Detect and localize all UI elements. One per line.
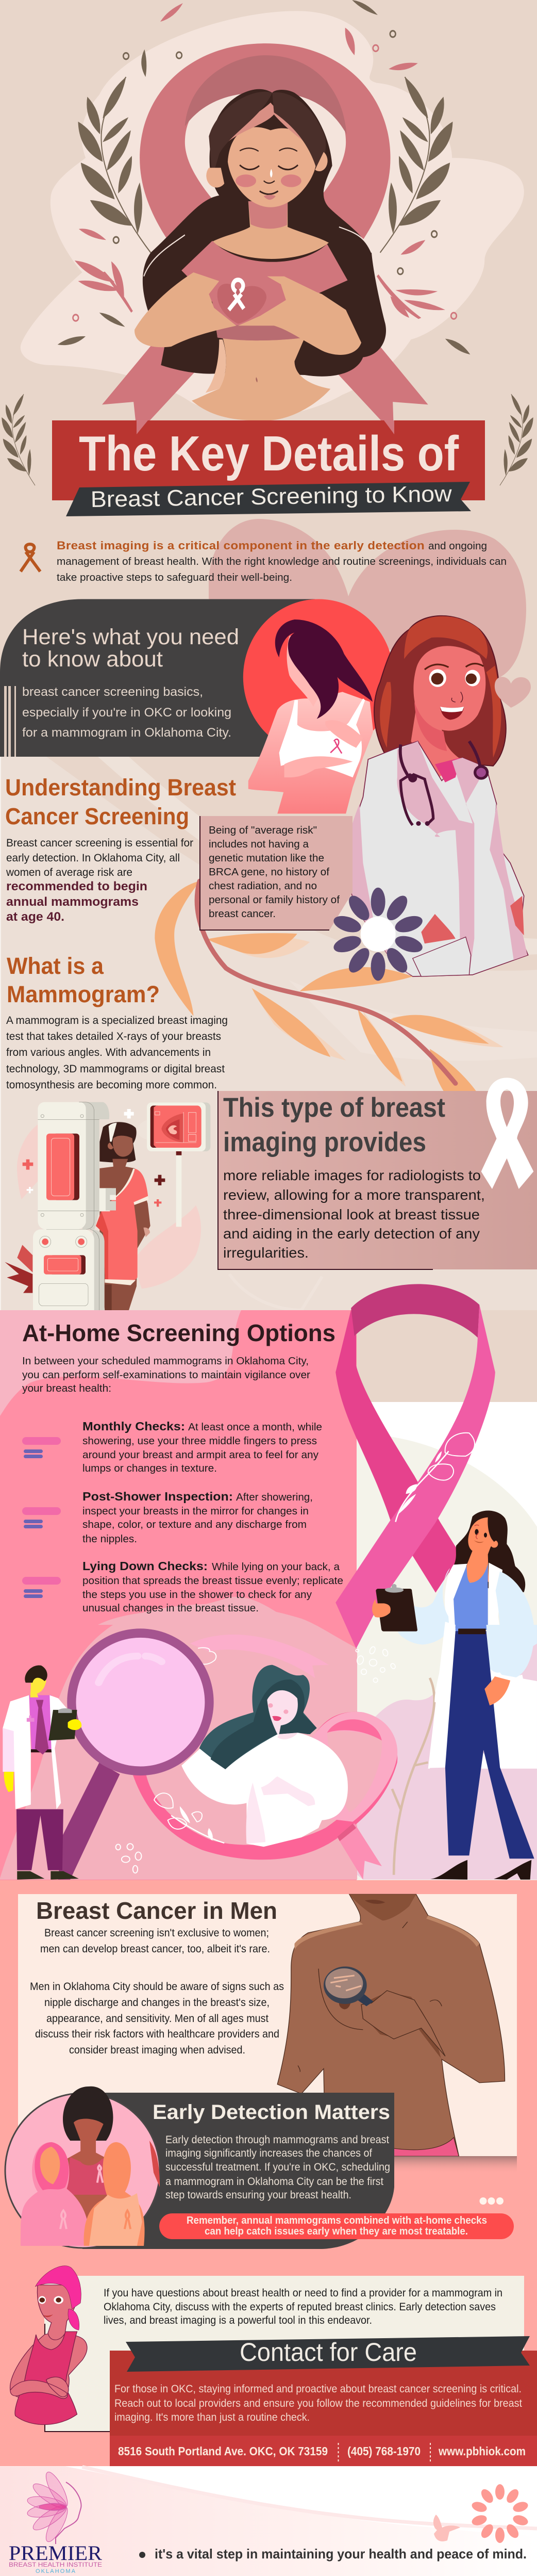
laurel bottom left (2, 394, 35, 485)
text: Early detection through mammograms and breast (165, 2134, 389, 2146)
section: understanding breast cancer screening (5, 774, 236, 924)
illustration: magnifier, woman and ribbon (3, 1628, 397, 1880)
pale pink shapes (357, 1625, 537, 1880)
footer (0, 2466, 537, 2576)
logo wordmark: PREMIER (9, 2541, 102, 2565)
illustration: circle of three women (5, 2086, 160, 2248)
light pink area (0, 1604, 357, 1880)
body text: early detection. In Oklahoma City, all (6, 852, 180, 864)
item: monthly checks: lumps or changes in texture. (82, 1463, 217, 1474)
body text: review, allowing for a more transparent, (223, 1187, 485, 1203)
text: appearance, and sensitivity. Men of all ages must (46, 2012, 268, 2025)
item: monthly checks: At least once a month, while (188, 1422, 322, 1433)
body text: technology, 3D mammograms or digital breast (6, 1063, 225, 1075)
three dots (479, 2197, 504, 2205)
panel: this type of breast imaging (218, 1078, 537, 1269)
panel: breast cancer in men (18, 1894, 517, 2156)
intro text lines (57, 541, 507, 583)
ribbon swoosh (190, 1635, 329, 1678)
ribbon behind the woman (102, 43, 428, 434)
callout: average risk: personal or family history of (209, 894, 340, 906)
callout: average risk: breast cancer. (209, 908, 276, 920)
highlighted text: recommended to begin (6, 879, 147, 893)
panel text: breast cancer screening basics, (22, 685, 203, 699)
large background heart (209, 519, 526, 680)
laurel top left (78, 77, 150, 253)
body text: women of average risk are (6, 867, 132, 878)
body text: Breast cancer screening is essential for (6, 837, 193, 849)
machine column (79, 1102, 109, 1229)
text: successful treatment. If you're in OKC, scheduling (165, 2161, 390, 2173)
item: monthly checks: around your breast and armpit area to feel for any (82, 1449, 318, 1461)
item: post-shower inspection: shape, color, or texture and any discharge from (82, 1519, 307, 1530)
body text: irregularities. (223, 1245, 309, 1261)
item: monthly checks: showering, use your three middle fingers to press (82, 1436, 317, 1447)
red reminder pill: Remember, annual mammograms combined with at-home checks (187, 2215, 487, 2226)
item: lying down checks (22, 1559, 343, 1614)
callout: average risk (199, 816, 353, 930)
faint heart outline (229, 1274, 322, 1310)
icon: white ribbon (481, 1078, 533, 1189)
icon: purple flower (331, 888, 425, 981)
panel: early detection matters (5, 2086, 514, 2249)
item: post-shower inspection (22, 1490, 313, 1545)
laurel bottom right (500, 394, 533, 485)
big pink ribbon (335, 1284, 495, 1649)
intro text lines: management of breast health. With the right knowledge and routine screenings, individuals can (57, 556, 507, 567)
intro text lines: and ongoing (428, 541, 487, 552)
callout: average risk: chest radiation, and no (209, 881, 317, 892)
text: consider breast imaging when advised. (69, 2044, 245, 2056)
hero illustration: woman with pink ribbon (2, 0, 533, 485)
intro block (21, 539, 425, 572)
item: lying down checks: position that spreads the breast tissue evenly; replicate (82, 1575, 343, 1587)
panel heading: Here's what you need (22, 625, 239, 649)
illustration: female doctor with clipboard (356, 1510, 537, 1880)
intro text: you can perform self-examinations to maintain vigilance over (22, 1369, 310, 1381)
woman (181, 1733, 348, 1847)
panel: questions: If you have questions about breast health or need to find a provider for a mammogram in (104, 2287, 502, 2299)
panel: contact for care (110, 2336, 537, 2466)
item: post-shower inspection: the nipples. (82, 1534, 137, 1545)
heading: Cancer Screening (5, 803, 189, 829)
illustration: woman with headscarf (10, 2266, 87, 2425)
callout: average risk: Being of "average risk" (209, 825, 317, 836)
illustration: red circle with woman self-checking (243, 599, 394, 813)
heading: This type of breast (223, 1093, 445, 1123)
item: lying down checks: unusual changes in the breast tissue. (82, 1603, 259, 1614)
section background: at-home screening (0, 1310, 537, 1880)
text: imaging. It's more than just a routine check. (114, 2411, 310, 2423)
plus icons (27, 1109, 134, 1193)
address strip: (405) 768-1970 (347, 2444, 421, 2458)
item: monthly checks (22, 1420, 322, 1474)
item: post-shower inspection: After showering, (236, 1492, 313, 1503)
icon: coral flower (471, 2484, 529, 2543)
callout: average risk: genetic mutation like the (209, 853, 324, 864)
body text: A mammogram is a specialized breast imaging (6, 1014, 228, 1026)
panel: questions (44, 2276, 524, 2432)
heading: Breast Cancer in Men (36, 1897, 277, 1924)
text: Men in Oklahoma City should be aware of signs such as (30, 1980, 284, 1993)
closing line: it's a vital step in maintaining your health and peace of mind. (155, 2546, 527, 2562)
at-home text (22, 1319, 335, 1394)
text: a mammogram in Oklahoma City can be the first (165, 2176, 383, 2188)
body text: test that takes detailed X-rays of your breasts (6, 1030, 221, 1042)
title heading: The Key Details of (79, 426, 459, 481)
body text: three-dimensional look at breast tissue (223, 1207, 480, 1222)
callout: average risk: includes not having a (209, 839, 309, 850)
decorative orange leaf branch (155, 881, 504, 1091)
heading: At-Home Screening Options (22, 1319, 335, 1346)
address strip (110, 2436, 537, 2466)
red reminder pill: can help catch issues early when they are most treatable. (205, 2226, 468, 2237)
panel text: for a mammogram in Oklahoma City. (22, 726, 231, 740)
logo: OKLAHOMA (36, 2568, 76, 2574)
section: what is a mammogram (6, 953, 228, 1091)
laurel top right (380, 77, 452, 253)
icon (22, 1577, 61, 1598)
patient (99, 1122, 137, 1163)
text: Reach out to local providers and ensure you follow the recommended guidelines for breast (114, 2398, 522, 2409)
lotus mark (26, 2469, 72, 2545)
dark panel: what you need to know (0, 599, 315, 757)
male doctor (16, 1809, 63, 1870)
illustration: male torso with magnifier (277, 1894, 505, 2156)
body text: and aiding in the early detection of any (223, 1226, 480, 1242)
body text: more reliable images for radiologists to (223, 1167, 481, 1183)
text: Breast cancer screening isn't exclusive to women; (44, 1927, 269, 1939)
illustration: mammogram machine and patient (5, 1102, 210, 1310)
ribbon heading: Contact for Care (240, 2338, 417, 2367)
text: men can develop breast cancer, too, albeit it's rare. (40, 1943, 270, 1955)
intro text: In between your scheduled mammograms in Oklahoma City, (22, 1356, 309, 1367)
icon (22, 1507, 61, 1528)
highlighted text: annual mammograms (6, 895, 139, 909)
item: lying down checks: While lying on your back, a (212, 1561, 340, 1573)
item: post-shower inspection: Post-Shower Inspection: (82, 1490, 233, 1503)
address strip: www.pbhiok.com (438, 2444, 526, 2458)
panel: questions: lives, and breast imaging is a powerful tool in this endeavor. (104, 2314, 372, 2326)
item: post-shower inspection: inspect your breasts in the mirror for changes in (82, 1506, 309, 1517)
item: lying down checks: Lying Down Checks: (82, 1559, 208, 1573)
logo (9, 2469, 102, 2574)
illustration: doctor in white coat (343, 616, 528, 976)
address strip: 8516 South Portland Ave. OKC, OK 73159 (118, 2444, 328, 2458)
heading: Mammogram? (7, 981, 160, 1007)
icon: butterfly (433, 2515, 460, 2541)
lower upper-section background (0, 757, 537, 1310)
title banner (52, 420, 485, 500)
ribbon heading (126, 2336, 530, 2372)
text: nipple discharge and changes in the breast's size, (44, 1996, 270, 2009)
handle (58, 1763, 120, 1880)
callout: average risk: BRCA gene, no history of (209, 867, 329, 878)
woman figure (135, 89, 386, 420)
subtitle ribbon: Breast Cancer Screening to Know (90, 481, 452, 512)
heading: imaging provides (223, 1127, 426, 1157)
body text: tomosynthesis are becoming more common. (6, 1079, 217, 1091)
panel text: especially if you're in OKC or looking (22, 706, 231, 720)
heading: What is a (7, 953, 104, 979)
panel shadow (394, 2156, 517, 2174)
body text: from various angles. With advancements in (6, 1046, 211, 1058)
icon: ribbon (21, 544, 40, 572)
intro text: your breast health: (22, 1383, 111, 1394)
intro text: Breast imaging is a critical component in the early detection (57, 539, 425, 552)
text: discuss their risk factors with healthcare providers and (35, 2028, 279, 2040)
section background: breast cancer in men (0, 1880, 537, 2466)
item: monthly checks: Monthly Checks: (82, 1420, 185, 1433)
icon: small heart (495, 677, 531, 708)
monitor (176, 1151, 181, 1227)
heading: Understanding Breast (5, 774, 236, 801)
panel heading: to know about (22, 647, 163, 672)
highlighted text: at age 40. (6, 910, 64, 924)
scattered leaves and rings (58, 0, 470, 354)
magnifier lens (67, 1628, 214, 1775)
red reminder pill (159, 2213, 514, 2239)
icon (22, 1437, 61, 1458)
text: For those in OKC, staying informed and proactive about breast cancer screening is critical. (114, 2383, 522, 2395)
panel: questions: Oklahoma City, discuss with the experts of reputed breast clinics. Early detection saves (104, 2301, 496, 2313)
logo: BREAST HEALTH INSTITUTE (9, 2561, 102, 2568)
heading: Early Detection Matters (153, 2101, 390, 2124)
intro text lines: take proactive steps to safeguard their well-being. (57, 572, 292, 583)
text: imaging significantly increases the chances of (165, 2147, 372, 2159)
item: lying down checks: the steps you use in the shower to check for any (82, 1589, 312, 1601)
text: step towards ensuring your breast health. (165, 2189, 351, 2201)
